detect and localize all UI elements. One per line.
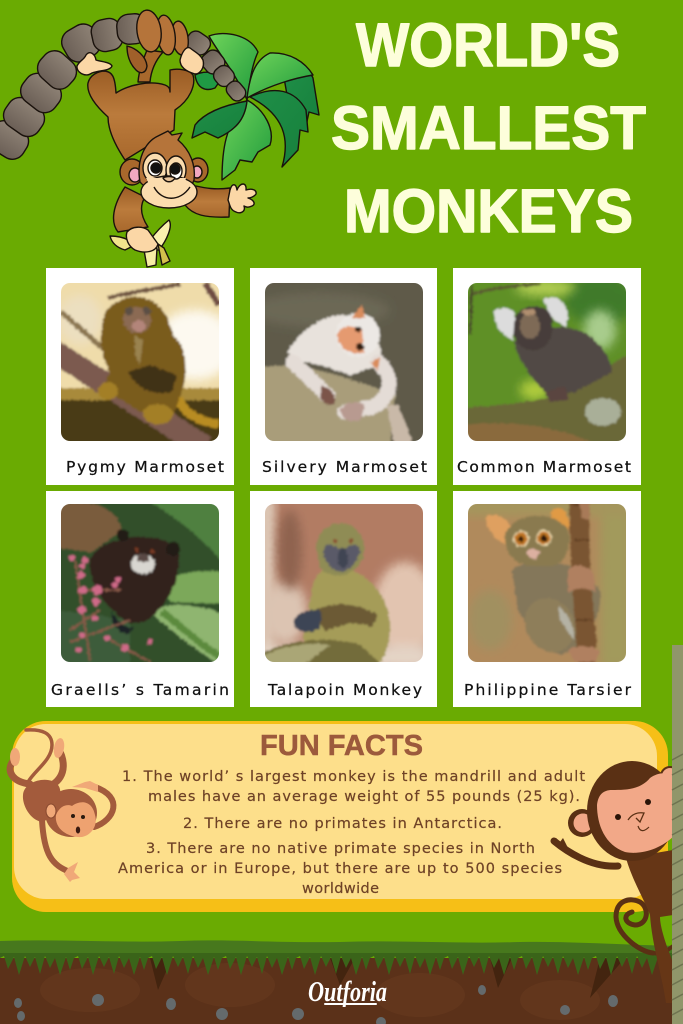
panel: fun facts bbox=[12, 721, 668, 912]
fact 3: America or in Europe, but there are up to 500 species bbox=[118, 861, 562, 877]
illustration: cartoon monkey hanging from palm branch bbox=[0, 9, 319, 267]
fact 1 bbox=[122, 769, 585, 805]
monkey tail wrap bbox=[127, 9, 190, 82]
card: Common Marmoset bbox=[453, 268, 641, 485]
fact 3 bbox=[118, 841, 562, 897]
logo: Outforia: Outforia bbox=[308, 976, 387, 1008]
card: Talapoin Monkey bbox=[250, 491, 437, 707]
photo: silvery marmoset bbox=[265, 283, 423, 441]
ground: soil and grass bbox=[0, 940, 683, 1024]
fact 1: males have an average weight of 55 pounds (25 kg). bbox=[148, 789, 580, 805]
card: Pygmy Marmoset bbox=[46, 268, 235, 485]
banana in hand bbox=[110, 220, 170, 267]
monkey hands on branch bbox=[77, 53, 112, 75]
tree trunk strip bbox=[672, 645, 683, 1024]
title: WORLD'S bbox=[356, 11, 620, 79]
title bbox=[331, 11, 646, 245]
label: Silvery Marmoset bbox=[262, 458, 427, 476]
label: Talapoin Monkey bbox=[267, 681, 422, 699]
card: Graells's Tamarin bbox=[46, 491, 234, 707]
illustration: cartoon monkey peeking from tree bbox=[551, 761, 679, 1003]
monkey arms and torso bbox=[88, 69, 194, 160]
title: MONKEYS bbox=[344, 177, 633, 245]
photo: talapoin monkey bbox=[265, 504, 423, 662]
card: Philippine Tarsier bbox=[453, 491, 641, 707]
palm leaves bbox=[192, 34, 319, 180]
illustration: upside-down cartoon monkey bbox=[10, 730, 113, 882]
label: Pygmy Marmoset bbox=[66, 458, 224, 476]
card: Silvery Marmoset bbox=[250, 268, 437, 485]
label: Common Marmoset bbox=[457, 458, 631, 476]
monkey head bbox=[120, 131, 208, 208]
photo: philippine tarsier bbox=[468, 504, 626, 662]
label: Philippine Tarsier bbox=[464, 681, 632, 699]
fact 2: 2. There are no primates in Antarctica. bbox=[183, 816, 502, 832]
monkey lower left arm bbox=[114, 187, 148, 232]
branch segments bbox=[0, 13, 249, 164]
fact 3: worldwide bbox=[302, 881, 379, 897]
photo: pygmy marmoset bbox=[61, 283, 219, 441]
label: Graells’ s Tamarin bbox=[51, 681, 229, 699]
title: SMALLEST bbox=[331, 94, 646, 162]
fact 1: 1. The world’ s largest monkey is the mandrill and adult bbox=[122, 769, 585, 785]
photo: common marmoset bbox=[468, 283, 626, 441]
monkey right arm bbox=[185, 186, 230, 217]
monkey waving hand bbox=[228, 184, 256, 213]
photo: graells's tamarin bbox=[61, 504, 219, 662]
fact 3: 3. There are no native primate species in North bbox=[146, 841, 535, 857]
heading: FUN FACTS bbox=[260, 730, 423, 762]
